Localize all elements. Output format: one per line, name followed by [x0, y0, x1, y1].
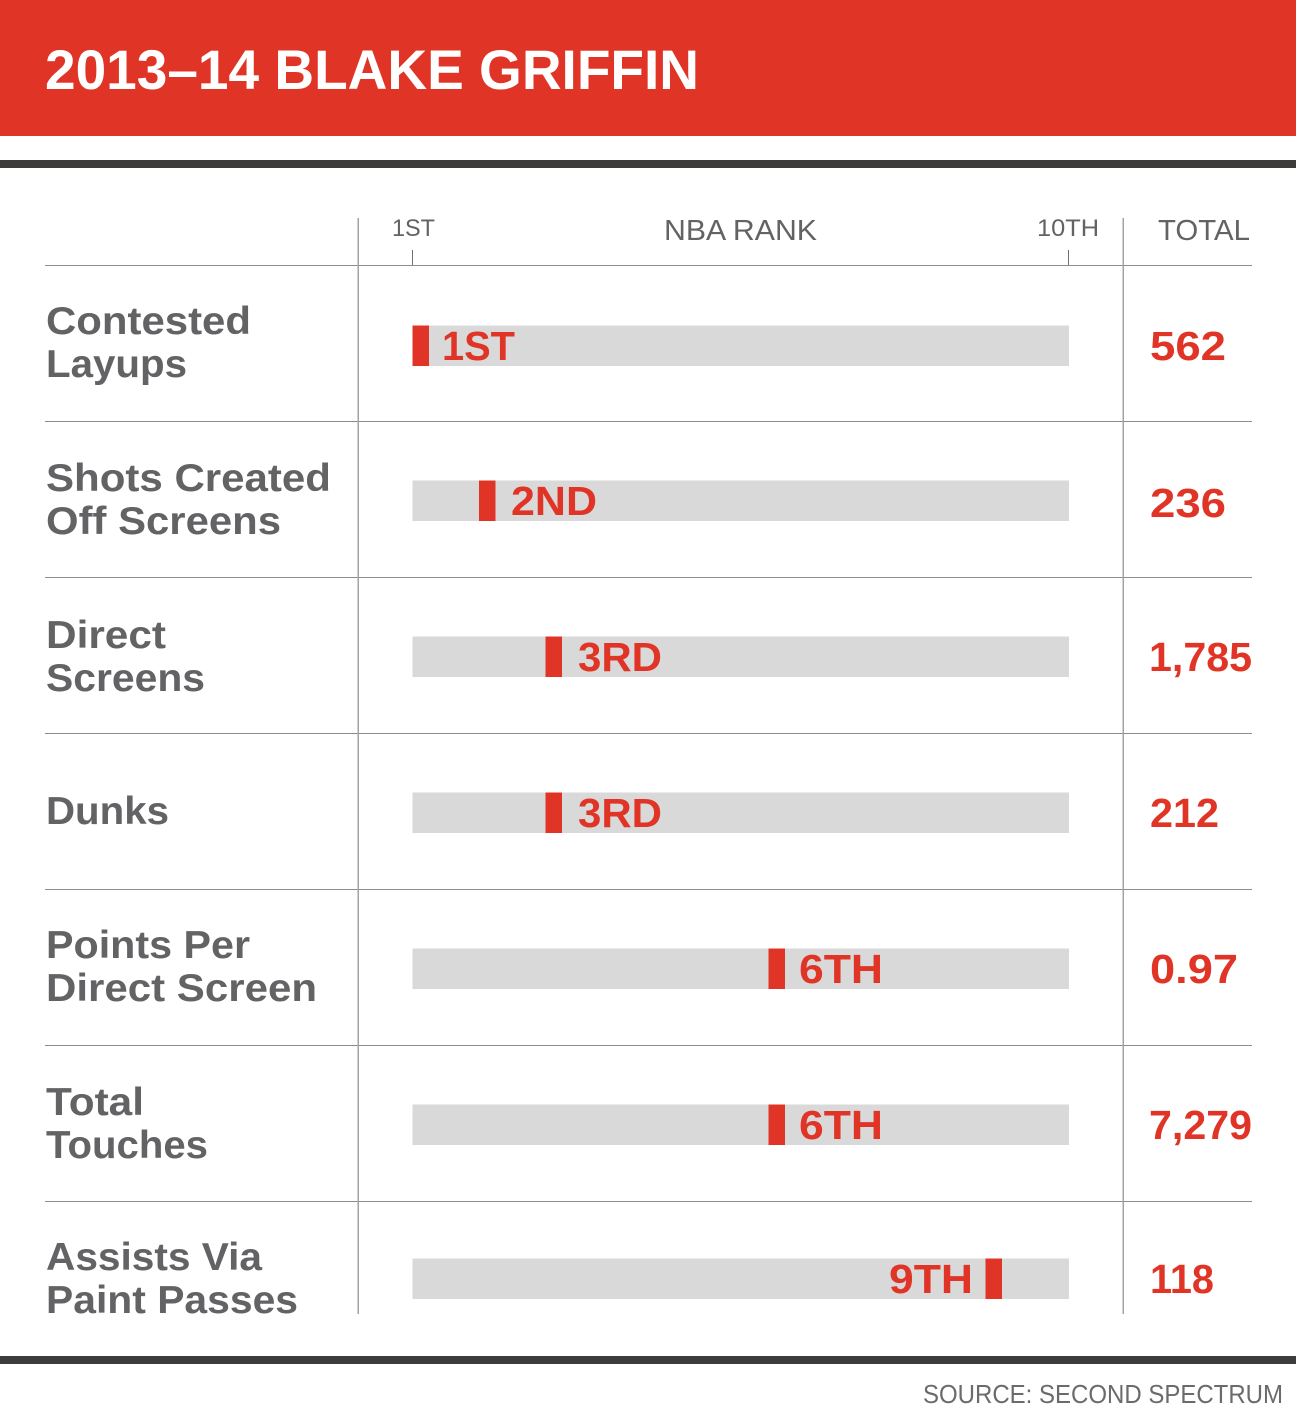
row: total touches: Total — [46, 1081, 144, 1124]
title banner — [0, 0, 1296, 136]
row: assists via paint passes: Paint Passes — [46, 1279, 298, 1322]
row: direct screens: 1,785 — [1149, 634, 1252, 680]
row: points per direct screen: Points Per — [46, 924, 250, 967]
column headers: 1ST — [392, 215, 435, 242]
row: shots created off screens: Off Screens — [46, 500, 281, 543]
row: direct screens: Screens — [46, 657, 205, 700]
row: direct screens: Direct — [46, 614, 166, 657]
row: assists via paint passes: 118 — [1150, 1256, 1214, 1302]
row: contested layups: 1ST — [442, 323, 515, 369]
row: contested layups: Layups — [46, 343, 187, 386]
row: points per direct screen — [46, 924, 1238, 1010]
row: dunks: 3RD — [578, 790, 662, 836]
row: total touches: 7,279 — [1149, 1102, 1252, 1148]
row: shots created off screens: Shots Created — [46, 457, 331, 500]
row: points per direct screen: 6TH — [799, 946, 883, 992]
row: total touches: Touches — [46, 1124, 208, 1167]
row: dunks: 212 — [1150, 790, 1219, 836]
row: shots created off screens: 236 — [1150, 480, 1226, 526]
row: dunks — [46, 790, 1219, 836]
row: dunks: Dunks — [46, 790, 169, 833]
row: assists via paint passes: Assists Via — [46, 1236, 262, 1279]
row: assists via paint passes — [46, 1236, 1214, 1322]
row: total touches — [46, 1081, 1252, 1167]
row: shots created off screens — [46, 457, 1226, 543]
column headers — [392, 215, 1250, 247]
row: contested layups: 562 — [1150, 323, 1226, 369]
row: points per direct screen: 0.97 — [1150, 946, 1238, 992]
row: shots created off screens: 2ND — [511, 478, 597, 524]
column headers: 10TH — [1037, 215, 1099, 242]
row: direct screens — [46, 614, 1252, 700]
row: contested layups — [46, 300, 1226, 386]
column headers: NBA RANK — [664, 215, 818, 247]
row: direct screens: 3RD — [578, 634, 662, 680]
title: 2013–14 BLAKE GRIFFIN — [45, 38, 699, 101]
row: total touches: 6TH — [799, 1102, 883, 1148]
row: assists via paint passes: 9TH — [889, 1256, 973, 1302]
row: contested layups: Contested — [46, 300, 251, 343]
column headers: TOTAL — [1158, 215, 1250, 247]
row: points per direct screen: Direct Screen — [46, 967, 317, 1010]
